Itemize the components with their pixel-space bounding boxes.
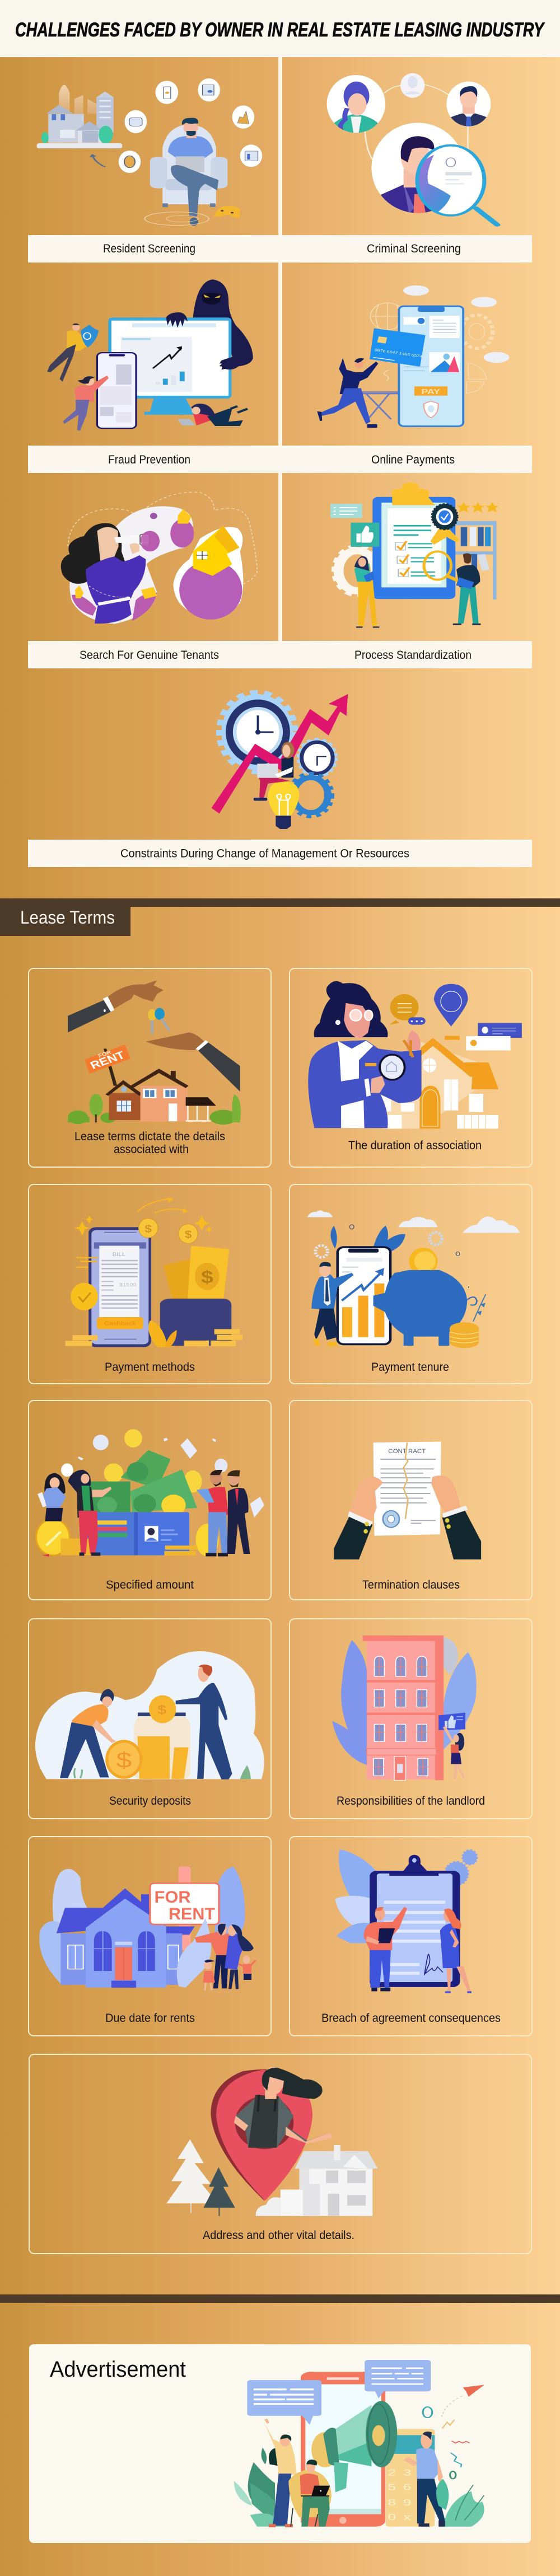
illustration: for rent sign with family and house bbox=[39, 1867, 256, 1990]
illustration: phone payment with credit card: PAY bbox=[421, 388, 441, 396]
illustration: megaphone, phone and people: x bbox=[403, 2512, 411, 2522]
illustration: two people saving coins in jar: $ bbox=[157, 1703, 166, 1717]
panel: process standardization bbox=[280, 483, 532, 668]
illustration: key handover and houses: FOR bbox=[97, 1050, 113, 1059]
illustration: phone bill, cash and wallet bbox=[66, 1197, 242, 1347]
caption: Lease terms dictate the details bbox=[74, 1130, 225, 1143]
illustration: phone bill, cash and wallet: $1500 bbox=[119, 1282, 137, 1288]
caption: The duration of association bbox=[348, 1139, 482, 1152]
illustration: two people saving coins in jar bbox=[35, 1651, 264, 1779]
caption: resident screening: Resident Screening bbox=[103, 242, 195, 255]
caption: Breach of agreement consequences bbox=[321, 2012, 501, 2025]
illustration: megaphone, phone and people: 8 bbox=[388, 2498, 396, 2507]
caption: Payment methods bbox=[105, 1361, 195, 1374]
card: due date for rents bbox=[29, 1837, 271, 2036]
caption: Termination clauses bbox=[362, 1579, 460, 1591]
caption: Security deposits bbox=[109, 1795, 191, 1807]
caption: process standardization: Process Standardization bbox=[354, 649, 472, 662]
illustration: piggy bank and growth chart bbox=[307, 1210, 520, 1348]
caption: associated with bbox=[114, 1143, 189, 1156]
caption: online payments: Online Payments bbox=[371, 453, 455, 466]
caption: Address and other vital details. bbox=[203, 2229, 354, 2242]
caption: fraud prevention bbox=[28, 446, 280, 473]
illustration: owner in armchair with house and icons bbox=[37, 78, 262, 226]
illustration: megaphone, phone and people: 3 bbox=[403, 2468, 412, 2477]
card: termination clauses bbox=[290, 1401, 532, 1600]
illustration: hooded thief behind monitor bbox=[47, 279, 253, 430]
illustration: megaphone, phone and people: 2 bbox=[388, 2468, 396, 2477]
card: the duration of association bbox=[290, 968, 532, 1167]
illustration: woman with telescope looking at houses bbox=[61, 492, 257, 624]
section header: lease terms: Lease Terms bbox=[20, 907, 115, 928]
illustration: key handover and houses: RENT bbox=[88, 1049, 127, 1071]
caption: fraud prevention: Fraud Prevention bbox=[108, 453, 190, 466]
illustration: phone bill, cash and wallet: BILL bbox=[113, 1252, 125, 1258]
caption: process standardization bbox=[280, 641, 532, 668]
caption: criminal screening: Criminal Screening bbox=[367, 242, 461, 255]
illustration: phone payment with credit card: 9876 6547 1465 6574 bbox=[374, 348, 423, 359]
caption bbox=[74, 1130, 225, 1156]
illustration: megaphone, phone and people: 0 bbox=[388, 2512, 396, 2522]
illustration: for rent sign with family and house: FOR bbox=[155, 1888, 191, 1907]
panel: fraud prevention bbox=[28, 279, 280, 473]
illustration: megaphone, phone and people: 6 bbox=[403, 2483, 412, 2492]
caption: constraints during change of management bbox=[28, 840, 532, 867]
illustration: key handover and houses bbox=[68, 980, 241, 1125]
illustration: phone bill, cash and wallet: $ bbox=[185, 1229, 192, 1240]
illustration: phone bill, cash and wallet: Cashback bbox=[104, 1320, 136, 1327]
card: lease terms dictate bbox=[29, 968, 271, 1167]
panel: advertisement bbox=[29, 2344, 531, 2543]
illustration: phone bill, cash and wallet: $ bbox=[201, 1267, 213, 1287]
caption: Specified amount bbox=[106, 1579, 194, 1591]
card: specified amount bbox=[29, 1401, 271, 1600]
card: breach of agreement bbox=[290, 1837, 532, 2036]
card: payment methods bbox=[29, 1184, 271, 1384]
caption: search for genuine tenants bbox=[28, 641, 280, 668]
heading: advertisement: Advertisement bbox=[50, 2357, 186, 2382]
illustration: apartment building with leaves bbox=[332, 1636, 477, 1780]
caption: Due date for rents bbox=[105, 2012, 195, 2025]
caption: Responsibilities of the landlord bbox=[337, 1795, 485, 1807]
panel: online payments bbox=[280, 285, 532, 473]
illustration: megaphone, phone and people bbox=[234, 2360, 484, 2527]
illustration: portraits under magnifying glass bbox=[327, 73, 497, 225]
illustration: hands tearing contract bbox=[334, 1442, 481, 1559]
card: responsibilities of the landlord bbox=[290, 1619, 532, 1819]
illustration: phone bill, cash and wallet: $ bbox=[144, 1224, 152, 1235]
caption: search for genuine tenants: Search For Genuine Tenants bbox=[80, 649, 219, 662]
illustration: for rent sign with family and house: RENT bbox=[169, 1905, 215, 1923]
illustration: hands tearing contract: CONT RACT bbox=[388, 1447, 426, 1455]
illustration: clocks gears and rising arrow bbox=[212, 692, 348, 829]
illustration: clipboard checklist with team bbox=[330, 483, 499, 628]
illustration: two people saving coins in jar: $ bbox=[116, 1749, 132, 1772]
panel: resident screening bbox=[28, 78, 280, 263]
caption: online payments bbox=[280, 446, 532, 473]
illustration: agent with magnifier and house bbox=[308, 981, 522, 1128]
panel: criminal screening bbox=[280, 73, 532, 263]
title band bbox=[0, 0, 560, 57]
caption: resident screening bbox=[28, 235, 280, 263]
caption: Payment tenure bbox=[371, 1361, 449, 1374]
section header: lease terms bbox=[0, 898, 560, 936]
illustration: wallet, cash and people bbox=[36, 1429, 264, 1557]
illustration: megaphone, phone and people: 9 bbox=[403, 2498, 412, 2507]
illustration: clipboard with two people bbox=[335, 1850, 477, 1993]
panel: constraints during change bbox=[28, 692, 532, 867]
illustration: megaphone, phone and people: 5 bbox=[388, 2483, 396, 2492]
caption: constraints during change of management: Constraints During Change of Management Or Resources bbox=[120, 847, 409, 860]
card: payment tenure bbox=[290, 1184, 532, 1384]
card: address and other vital details bbox=[29, 2054, 531, 2254]
card: security deposits bbox=[29, 1619, 271, 1819]
panel: search for genuine tenants bbox=[28, 492, 280, 668]
illustration: phone payment with credit card bbox=[317, 285, 510, 428]
caption: criminal screening bbox=[280, 235, 532, 263]
illustration: woman in map pin with house and trees bbox=[166, 2067, 378, 2216]
